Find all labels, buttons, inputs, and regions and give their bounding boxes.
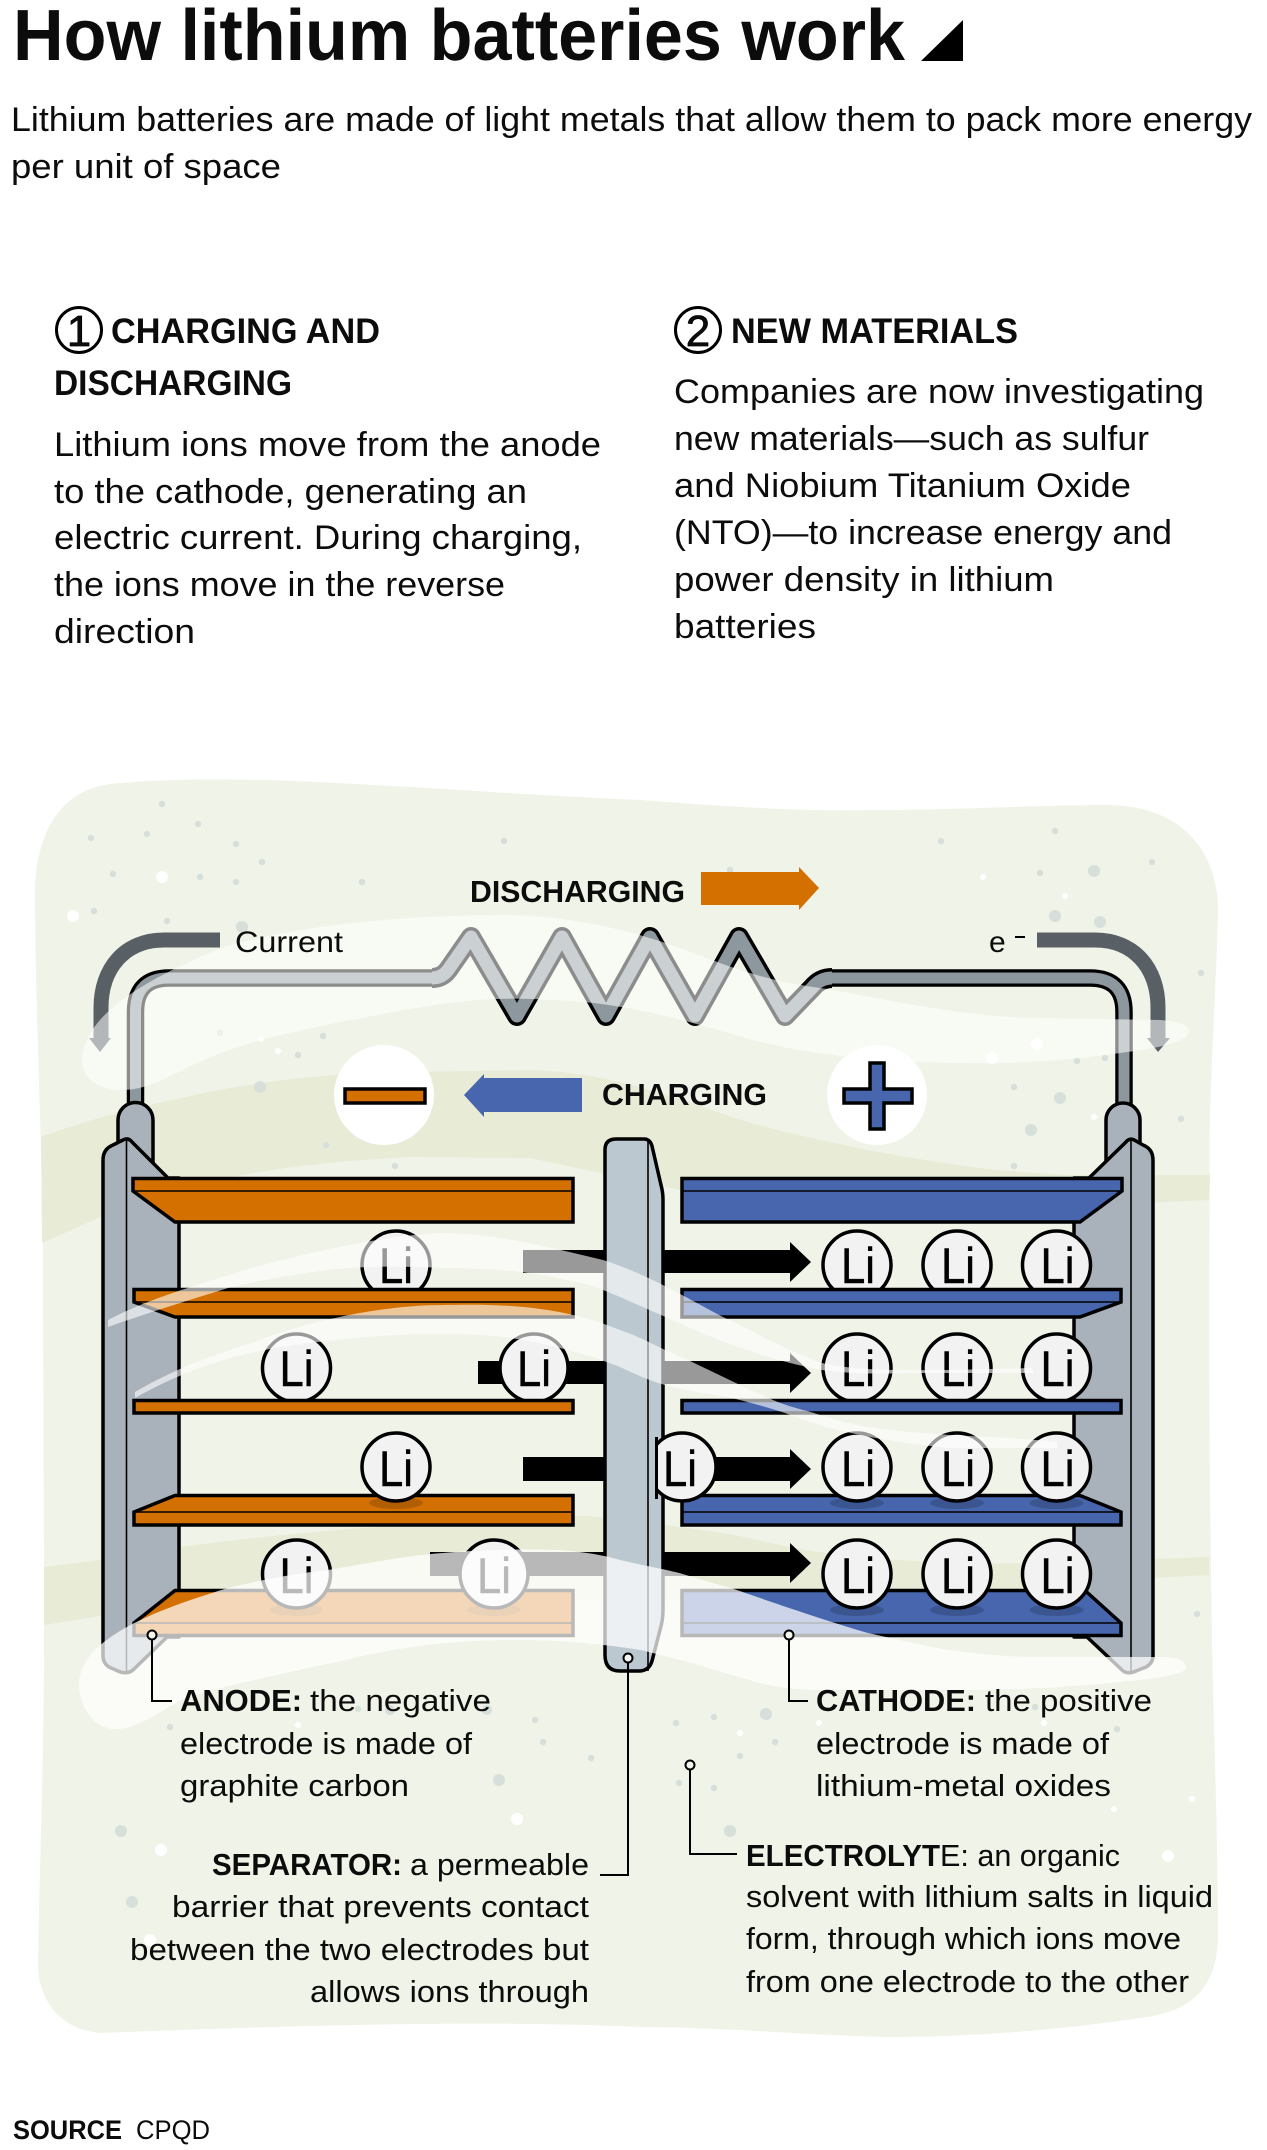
lithium ions in front of the electrode layers: Li (941, 1548, 975, 1604)
lithium ions behind the electrode layers: Li (841, 1341, 875, 1397)
lithium ions behind the electrode layers: Li (517, 1341, 551, 1397)
lithium ions in front of the electrode layers: Li (1040, 1441, 1074, 1497)
text block: new materials description: and Niobium Titanium Oxide (674, 467, 1131, 505)
callout: separator: SEPARATOR: (212, 1847, 402, 1882)
source: CPQD (136, 2115, 210, 2145)
callout: electrolyte: solvent with lithium salts in liquid (746, 1879, 1213, 1914)
callout: cathode: electrode is made of (816, 1726, 1109, 1761)
cathode current collector (1074, 1139, 1153, 1674)
text block: charging description: direction (54, 613, 195, 651)
heading: charging and discharging: DISCHARGING (54, 364, 292, 403)
terminal: right (1106, 1103, 1140, 1200)
lithium ion passing through the separator: Li (663, 1441, 697, 1497)
text block: new materials description: batteries (674, 608, 816, 646)
label: electron: e (989, 926, 1006, 959)
text block: new materials description (674, 373, 1204, 646)
callout: separator: allows ions through (310, 1974, 589, 2009)
text block: new materials description: (NTO)—to increase energy and (674, 514, 1172, 552)
icon: minus terminal (334, 1045, 434, 1145)
wire circuit with resistor coil (136, 937, 1124, 1105)
lithium ions behind the electrode layers: Li (1040, 1238, 1074, 1294)
section 2: new materials (674, 307, 1204, 646)
anode current collector (103, 1139, 179, 1674)
callout: anode (148, 1630, 491, 1803)
terminal: left (118, 1102, 153, 1200)
lithium ions behind the electrode layers: Li (280, 1341, 314, 1397)
arrow: current (89, 940, 220, 1052)
callout: separator: between the two electrodes but (130, 1932, 589, 1967)
callout: anode: ANODE: (180, 1683, 302, 1718)
callout: electrolyte: ELECTROLYT (746, 1838, 940, 1873)
lithium ions in front of the electrode layers (262, 1433, 1090, 1616)
heading: charging and discharging: CHARGING AND (111, 312, 380, 351)
text block: new materials description: power density in lithium (674, 561, 1054, 599)
icon: number 2 (676, 307, 720, 356)
anode layers (133, 1178, 573, 1636)
lithium ions in front of the electrode layers: Li (1040, 1548, 1074, 1604)
callout: anode: graphite carbon (180, 1768, 409, 1803)
callout: separator: barrier that prevents contact (172, 1889, 589, 1924)
lithium ions behind the electrode layers: Li (379, 1238, 413, 1294)
text block: charging description (54, 426, 601, 651)
lithium ions in front of the electrode layers: Li (941, 1441, 975, 1497)
source (13, 2115, 210, 2145)
source: SOURCE (13, 2115, 122, 2145)
lithium ions in front of the electrode layers: Li (280, 1548, 314, 1604)
arrow: discharging (701, 867, 819, 910)
electrolyte veils (79, 915, 1189, 1729)
callout: cathode: lithium-metal oxides (816, 1768, 1111, 1803)
callout: electrolyte: from one electrode to the other (746, 1964, 1189, 1999)
lithium ions in front of the electrode layers: Li (379, 1441, 413, 1497)
lithium ions behind the electrode layers: Li (941, 1238, 975, 1294)
subtitle: per unit of space (11, 148, 281, 186)
callout: separator: a permeable (410, 1847, 589, 1882)
lithium ions behind the electrode layers: Li (941, 1341, 975, 1397)
callout: cathode: the positive (985, 1683, 1152, 1718)
arrow: charging (464, 1074, 582, 1117)
lithium ion passing through the separator (648, 1433, 716, 1501)
panel: battery diagram background (35, 780, 1218, 2037)
section 1: charging and discharging (54, 307, 601, 651)
text block: new materials description: Companies are now investigating (674, 373, 1204, 411)
callout: separator (130, 1654, 632, 2009)
text block: charging description: the ions move in the reverse (54, 566, 505, 604)
subtitle (11, 101, 1252, 186)
label: discharging: DISCHARGING (470, 874, 685, 909)
text block: charging description: electric current. During charging, (54, 519, 582, 557)
callout: electrolyte: form, through which ions move (746, 1921, 1181, 1956)
callout: anode: the negative (310, 1683, 491, 1718)
label: current: Current (235, 926, 344, 959)
heading: charging and discharging (54, 312, 380, 403)
lithium ions behind the electrode layers: Li (841, 1238, 875, 1294)
lithium ions behind the electrode layers: Li (1040, 1341, 1074, 1397)
icon: number 1 (56, 307, 102, 356)
text block: charging description: Lithium ions move from the anode (54, 426, 601, 464)
separator (605, 1139, 663, 1671)
callout: anode: electrode is made of (180, 1726, 472, 1761)
lithium ions behind the electrode layers (262, 1231, 1090, 1402)
arrow: electron flow (1037, 940, 1170, 1052)
icon: number 1: 1 (67, 307, 91, 356)
callout: electrolyte: E: an organic (940, 1838, 1120, 1873)
callout: cathode: CATHODE: (816, 1683, 976, 1718)
text block: charging description: to the cathode, generating an (54, 473, 527, 511)
black ion-flow arrows (430, 1242, 811, 1583)
lithium ions in front of the electrode layers: Li (477, 1548, 511, 1604)
cathode layers (682, 1178, 1122, 1636)
subtitle: Lithium batteries are made of light metals that allow them to pack more energy (11, 101, 1252, 139)
callout: cathode (784, 1630, 1152, 1803)
lithium ions in front of the electrode layers: Li (841, 1548, 875, 1604)
lithium ions in front of the electrode layers: Li (841, 1441, 875, 1497)
label: electron (989, 926, 1025, 959)
icon: plus terminal (827, 1045, 927, 1145)
heading: new materials: NEW MATERIALS (731, 312, 1018, 351)
callout: electrolyte (686, 1760, 1213, 1999)
icon: number 2: 2 (686, 307, 710, 356)
text block: new materials description: new materials—such as sulfur (674, 420, 1149, 458)
label: charging: CHARGING (602, 1077, 767, 1112)
